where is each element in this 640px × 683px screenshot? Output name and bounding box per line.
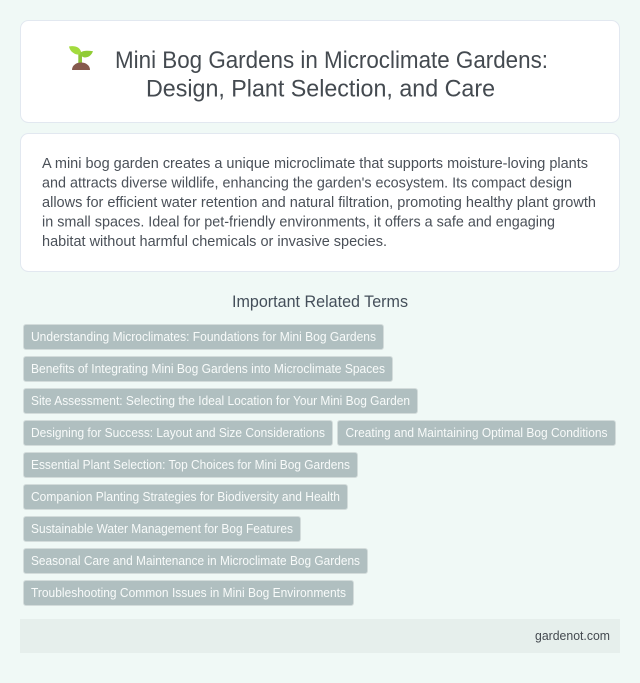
tag 5 — [338, 420, 616, 446]
footer: gardenot.com — [535, 629, 610, 643]
tag 8 — [24, 516, 300, 542]
footer — [20, 619, 620, 653]
tag 10: Troubleshooting Common Issues in Mini Bog Environments — [31, 585, 346, 600]
tag 2 — [24, 356, 392, 382]
text block: description: A mini bog garden creates a unique microclimate that supports moisture-loving plants — [42, 156, 588, 172]
title: Design, Plant Selection, and Care — [146, 76, 495, 102]
text block: description: allows for efficient water retention and natural filtration, promoting healthy plant growth — [42, 195, 596, 211]
tag 2: Benefits of Integrating Mini Bog Gardens into Microclimate Spaces — [31, 361, 385, 376]
tag 4 — [24, 420, 332, 446]
panel: title card — [20, 20, 620, 122]
list: related term tags — [24, 324, 616, 606]
tag 3 — [24, 388, 418, 414]
tag 1 — [24, 324, 384, 350]
icon: sprout — [69, 46, 93, 70]
tag 1: Understanding Microclimates: Foundations for Mini Bog Gardens — [31, 329, 376, 344]
text block: description: habitat without harmful chemicals or invasive species. — [42, 234, 387, 250]
tag 10 — [24, 580, 354, 606]
tag 7: Companion Planting Strategies for Biodiversity and Health — [31, 489, 340, 504]
tag 6: Essential Plant Selection: Top Choices for Mini Bog Gardens — [31, 457, 350, 472]
text block: description: in small spaces. Ideal for pet-friendly environments, it offers a safe and engaging — [42, 214, 555, 230]
tag 7 — [24, 484, 348, 510]
tag 9: Seasonal Care and Maintenance in Microclimate Bog Gardens — [31, 553, 360, 568]
text block: description — [42, 156, 596, 250]
tag 9 — [24, 548, 368, 574]
title: Mini Bog Gardens in Microclimate Gardens: — [115, 47, 548, 74]
text block: description: and attracts diverse wildlife, enhancing the garden's ecosystem. Its compact design — [42, 176, 572, 192]
tag 6 — [24, 452, 358, 478]
heading: related terms: Important Related Terms — [232, 293, 408, 311]
tag 5: Creating and Maintaining Optimal Bog Conditions — [346, 425, 608, 440]
tag 3: Site Assessment: Selecting the Ideal Location for Your Mini Bog Garden — [31, 393, 410, 408]
tag 4: Designing for Success: Layout and Size Considerations — [31, 425, 325, 440]
tag 8: Sustainable Water Management for Bog Features — [31, 521, 293, 536]
title — [115, 47, 548, 102]
panel: description — [20, 134, 620, 272]
